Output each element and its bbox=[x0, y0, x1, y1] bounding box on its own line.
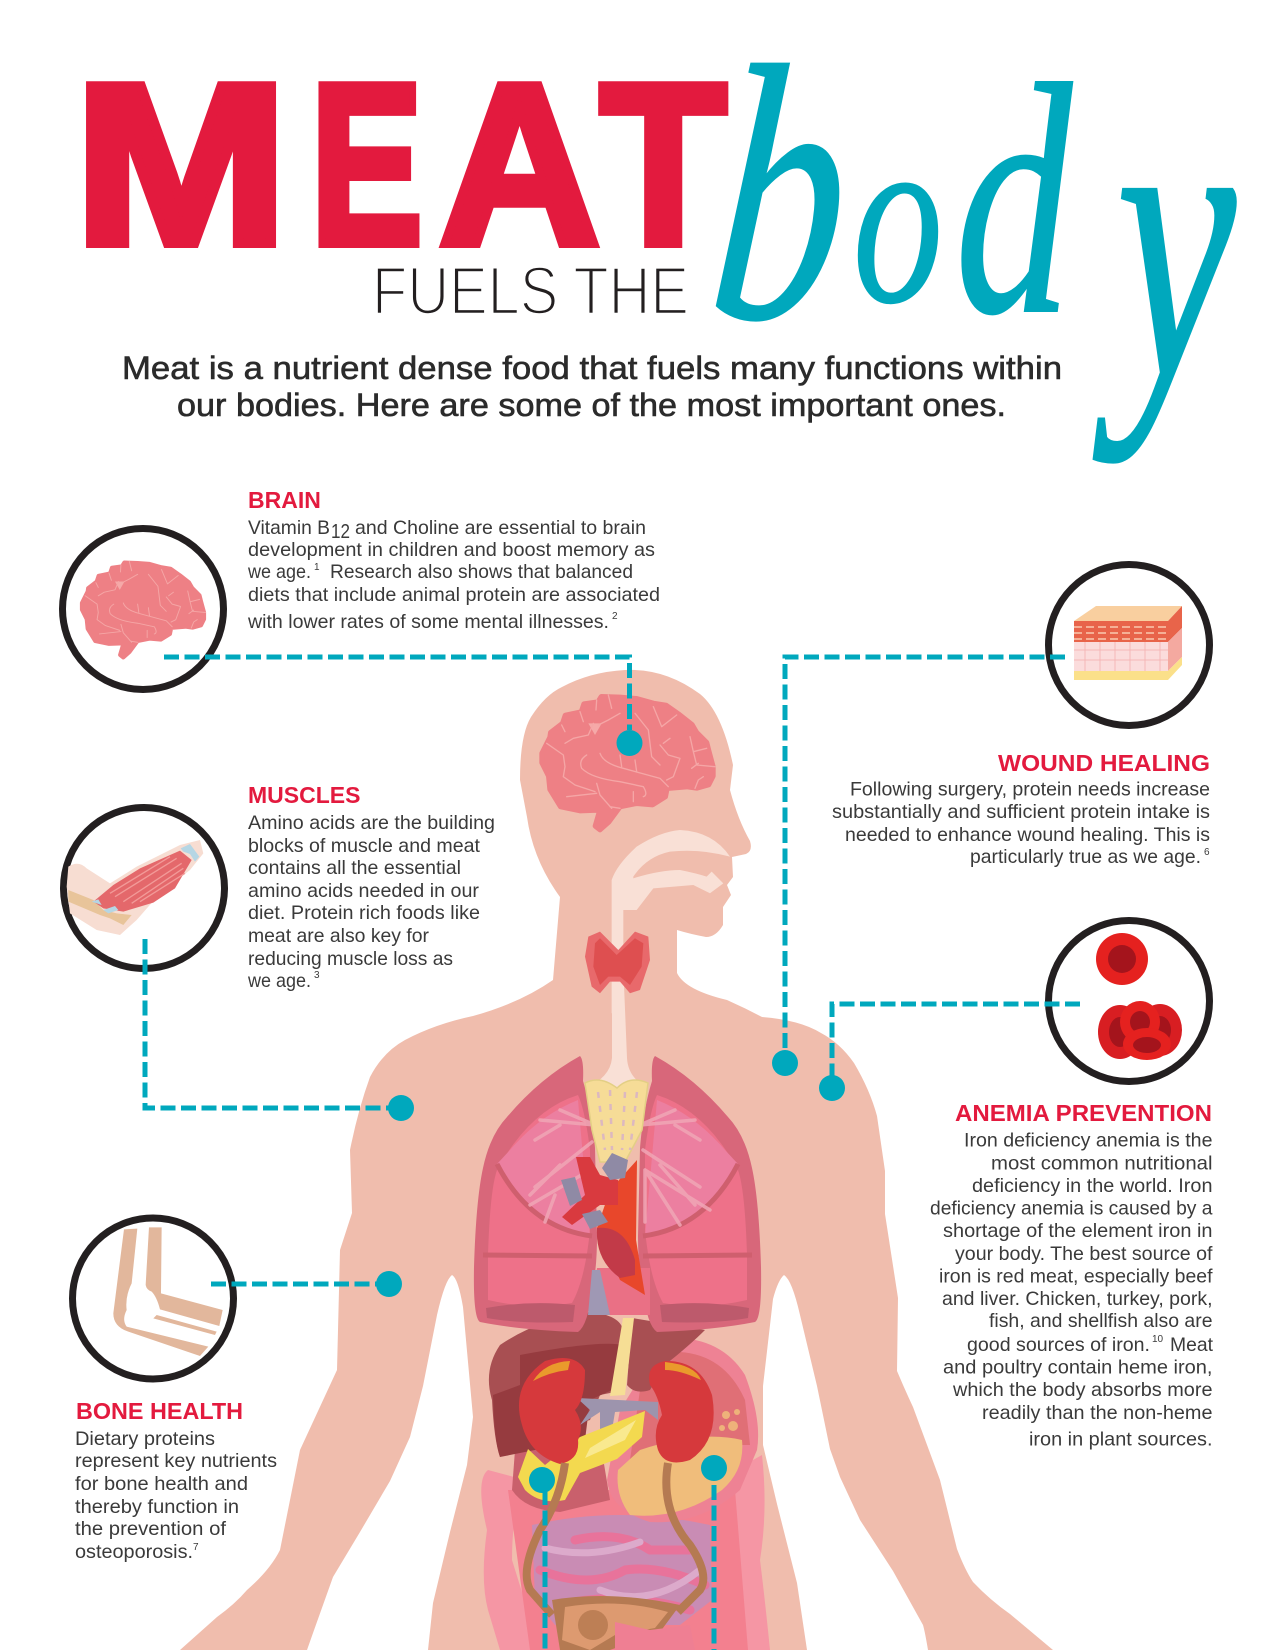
connector: brain bbox=[164, 657, 642, 756]
title word: MEAT: T bbox=[600, 37, 726, 293]
lower mediastinum bbox=[590, 1268, 650, 1315]
bone health text: thereby function in bbox=[75, 1496, 239, 1518]
heading: bone health: BONE HEALTH bbox=[76, 1398, 243, 1424]
spleen lobe bbox=[627, 1318, 705, 1392]
vena cava bbox=[588, 1270, 610, 1315]
brain text: we age. bbox=[247, 561, 311, 583]
title word: body: o bbox=[853, 79, 943, 356]
duodenum bbox=[512, 1440, 610, 1512]
intro text: our bodies. Here are some of the most important ones. bbox=[177, 387, 1006, 423]
bone health text: Dietary proteins bbox=[75, 1428, 215, 1450]
blood cell cluster bbox=[1098, 1001, 1182, 1060]
bone health text: represent key nutrients bbox=[75, 1450, 277, 1472]
connector: anemia prevention bbox=[819, 1004, 1080, 1101]
icon: brain bbox=[62, 528, 224, 690]
connector: muscles bbox=[145, 939, 414, 1121]
wound healing text: 6 bbox=[1204, 847, 1210, 858]
muscles text: amino acids needed in our bbox=[248, 880, 479, 902]
muscles text: meat are also key for bbox=[248, 925, 429, 947]
right lung bbox=[638, 1056, 761, 1332]
panel: anemia prevention bbox=[930, 920, 1214, 1450]
pancreas bbox=[518, 1411, 645, 1501]
icon: red blood cells bbox=[1048, 920, 1210, 1082]
muscles text: Amino acids are the building bbox=[248, 812, 495, 834]
left adrenal bbox=[533, 1361, 570, 1381]
left lung bbox=[474, 1056, 597, 1332]
bone health text: for bone health and bbox=[75, 1473, 248, 1495]
connector: wound healing bbox=[772, 657, 1065, 1076]
abdominal cavity bbox=[508, 1490, 748, 1650]
anemia prevention text: good sources of iron. bbox=[967, 1334, 1150, 1356]
connector: lower right organ bbox=[701, 1455, 727, 1650]
brain text: 1 bbox=[314, 562, 320, 573]
anemia prevention text: deficiency anemia is caused by a bbox=[930, 1198, 1213, 1220]
thyroid bbox=[585, 932, 650, 993]
intro text bbox=[122, 350, 1062, 423]
right kidney bbox=[649, 1361, 714, 1462]
icon: elbow bones bbox=[72, 1218, 234, 1379]
anemia prevention text bbox=[930, 1130, 1214, 1450]
muscles text: blocks of muscle and meat bbox=[248, 835, 481, 857]
right adrenal bbox=[665, 1362, 701, 1380]
title words: FUELS THE: FUELS THE bbox=[372, 253, 689, 329]
title word: MEAT: M bbox=[74, 36, 288, 292]
title word: MEAT: E bbox=[311, 36, 423, 292]
anemia prevention text: and liver. Chicken, turkey, pork, bbox=[942, 1288, 1212, 1310]
single blood cell bbox=[1096, 933, 1148, 985]
kidneys bbox=[518, 1358, 714, 1501]
muscles text: we age. bbox=[247, 970, 311, 992]
panel: bone health bbox=[72, 1218, 277, 1563]
central duct bbox=[610, 1318, 634, 1396]
brain bbox=[542, 695, 715, 830]
muscles text: reducing muscle loss as bbox=[248, 948, 453, 970]
anemia prevention text: iron is red meat, especially beef bbox=[939, 1266, 1213, 1288]
anemia prevention text: which the body absorbs more bbox=[952, 1379, 1212, 1401]
connector: lower left organ bbox=[529, 1467, 555, 1650]
panel: wound healing bbox=[832, 564, 1210, 868]
airway bbox=[612, 830, 730, 1013]
anemia prevention text: deficiency in the world. Iron bbox=[972, 1175, 1212, 1197]
anemia prevention text: shortage of the element iron in bbox=[943, 1220, 1212, 1242]
renal vessels bbox=[577, 1398, 658, 1430]
brain text: Research also shows that balanced bbox=[330, 561, 633, 583]
anemia prevention text: your body. The best source of bbox=[955, 1243, 1213, 1265]
title word: body bbox=[699, 0, 1238, 464]
bone health text: osteoporosis. bbox=[75, 1541, 193, 1563]
wound healing text: Following surgery, protein needs increase bbox=[850, 778, 1210, 800]
heading: brain: BRAIN bbox=[248, 487, 321, 513]
muscles text bbox=[247, 812, 495, 992]
title word: body: b bbox=[699, 0, 864, 396]
muscles text: contains all the essential bbox=[248, 857, 461, 879]
title word: MEAT: A bbox=[439, 36, 600, 292]
heading: anemia prevention: ANEMIA PREVENTION bbox=[955, 1100, 1212, 1126]
left kidney bbox=[519, 1358, 585, 1464]
human body illustration bbox=[180, 670, 1053, 1650]
bone health text bbox=[75, 1428, 277, 1563]
brain text: and Choline are essential to brain bbox=[355, 517, 646, 539]
anemia prevention text: Meat bbox=[1170, 1334, 1214, 1356]
title word: body: d bbox=[955, 17, 1076, 383]
brain text bbox=[247, 517, 660, 633]
icon: arm muscle bbox=[64, 808, 224, 968]
thymus bbox=[585, 1080, 648, 1162]
icon: skin layers bbox=[1048, 564, 1210, 726]
anemia prevention text: and poultry contain heme iron, bbox=[943, 1356, 1212, 1378]
title word: body: y bbox=[1091, 15, 1238, 464]
heart bbox=[561, 1153, 645, 1295]
muscles text: 3 bbox=[314, 970, 320, 981]
anemia prevention text: iron in plant sources. bbox=[1029, 1428, 1212, 1450]
wound healing text: needed to enhance wound healing. This is bbox=[845, 824, 1210, 846]
anemia prevention text: fish, and shellfish also are bbox=[989, 1310, 1212, 1332]
anemia prevention text: 10 bbox=[1152, 1334, 1164, 1345]
lungs bbox=[474, 1056, 761, 1332]
trachea bbox=[585, 985, 648, 1088]
wound healing text: particularly true as we age. bbox=[970, 846, 1201, 868]
body silhouette bbox=[180, 670, 1053, 1650]
small intestine bbox=[532, 1515, 712, 1625]
heading: muscles: MUSCLES bbox=[248, 782, 360, 808]
wound healing text: substantially and sufficient protein intake is bbox=[832, 801, 1210, 823]
panel: brain bbox=[62, 487, 660, 690]
panel: muscles bbox=[64, 782, 495, 992]
brain text: 12 bbox=[331, 521, 350, 543]
bone health text: 7 bbox=[193, 1542, 199, 1553]
brain text: 2 bbox=[612, 611, 618, 622]
muscles text: diet. Protein rich foods like bbox=[248, 902, 480, 924]
anemia prevention text: most common nutritional bbox=[991, 1152, 1212, 1174]
anemia prevention text: readily than the non-heme bbox=[982, 1402, 1212, 1424]
stomach bbox=[607, 1338, 758, 1522]
wound healing text bbox=[832, 778, 1210, 868]
title bbox=[74, 0, 1238, 464]
large intestine bbox=[481, 1455, 770, 1650]
bladder and reproductive organs bbox=[552, 1596, 695, 1650]
intro text: Meat is a nutrient dense food that fuels many functions within bbox=[122, 350, 1062, 386]
heading: wound healing: WOUND HEALING bbox=[998, 750, 1210, 776]
ureters bbox=[527, 1463, 703, 1615]
liver bbox=[489, 1312, 625, 1457]
connector: bone health bbox=[211, 1271, 402, 1297]
brain text: with lower rates of some mental illnesses. bbox=[247, 611, 609, 633]
anemia prevention text: Iron deficiency anemia is the bbox=[964, 1130, 1212, 1152]
title word: MEAT bbox=[74, 36, 726, 293]
bone health text: the prevention of bbox=[75, 1518, 227, 1540]
brain text: Vitamin B bbox=[248, 517, 330, 539]
brain text: diets that include animal protein are associated bbox=[248, 584, 660, 606]
brain text: development in children and boost memory as bbox=[248, 539, 655, 561]
